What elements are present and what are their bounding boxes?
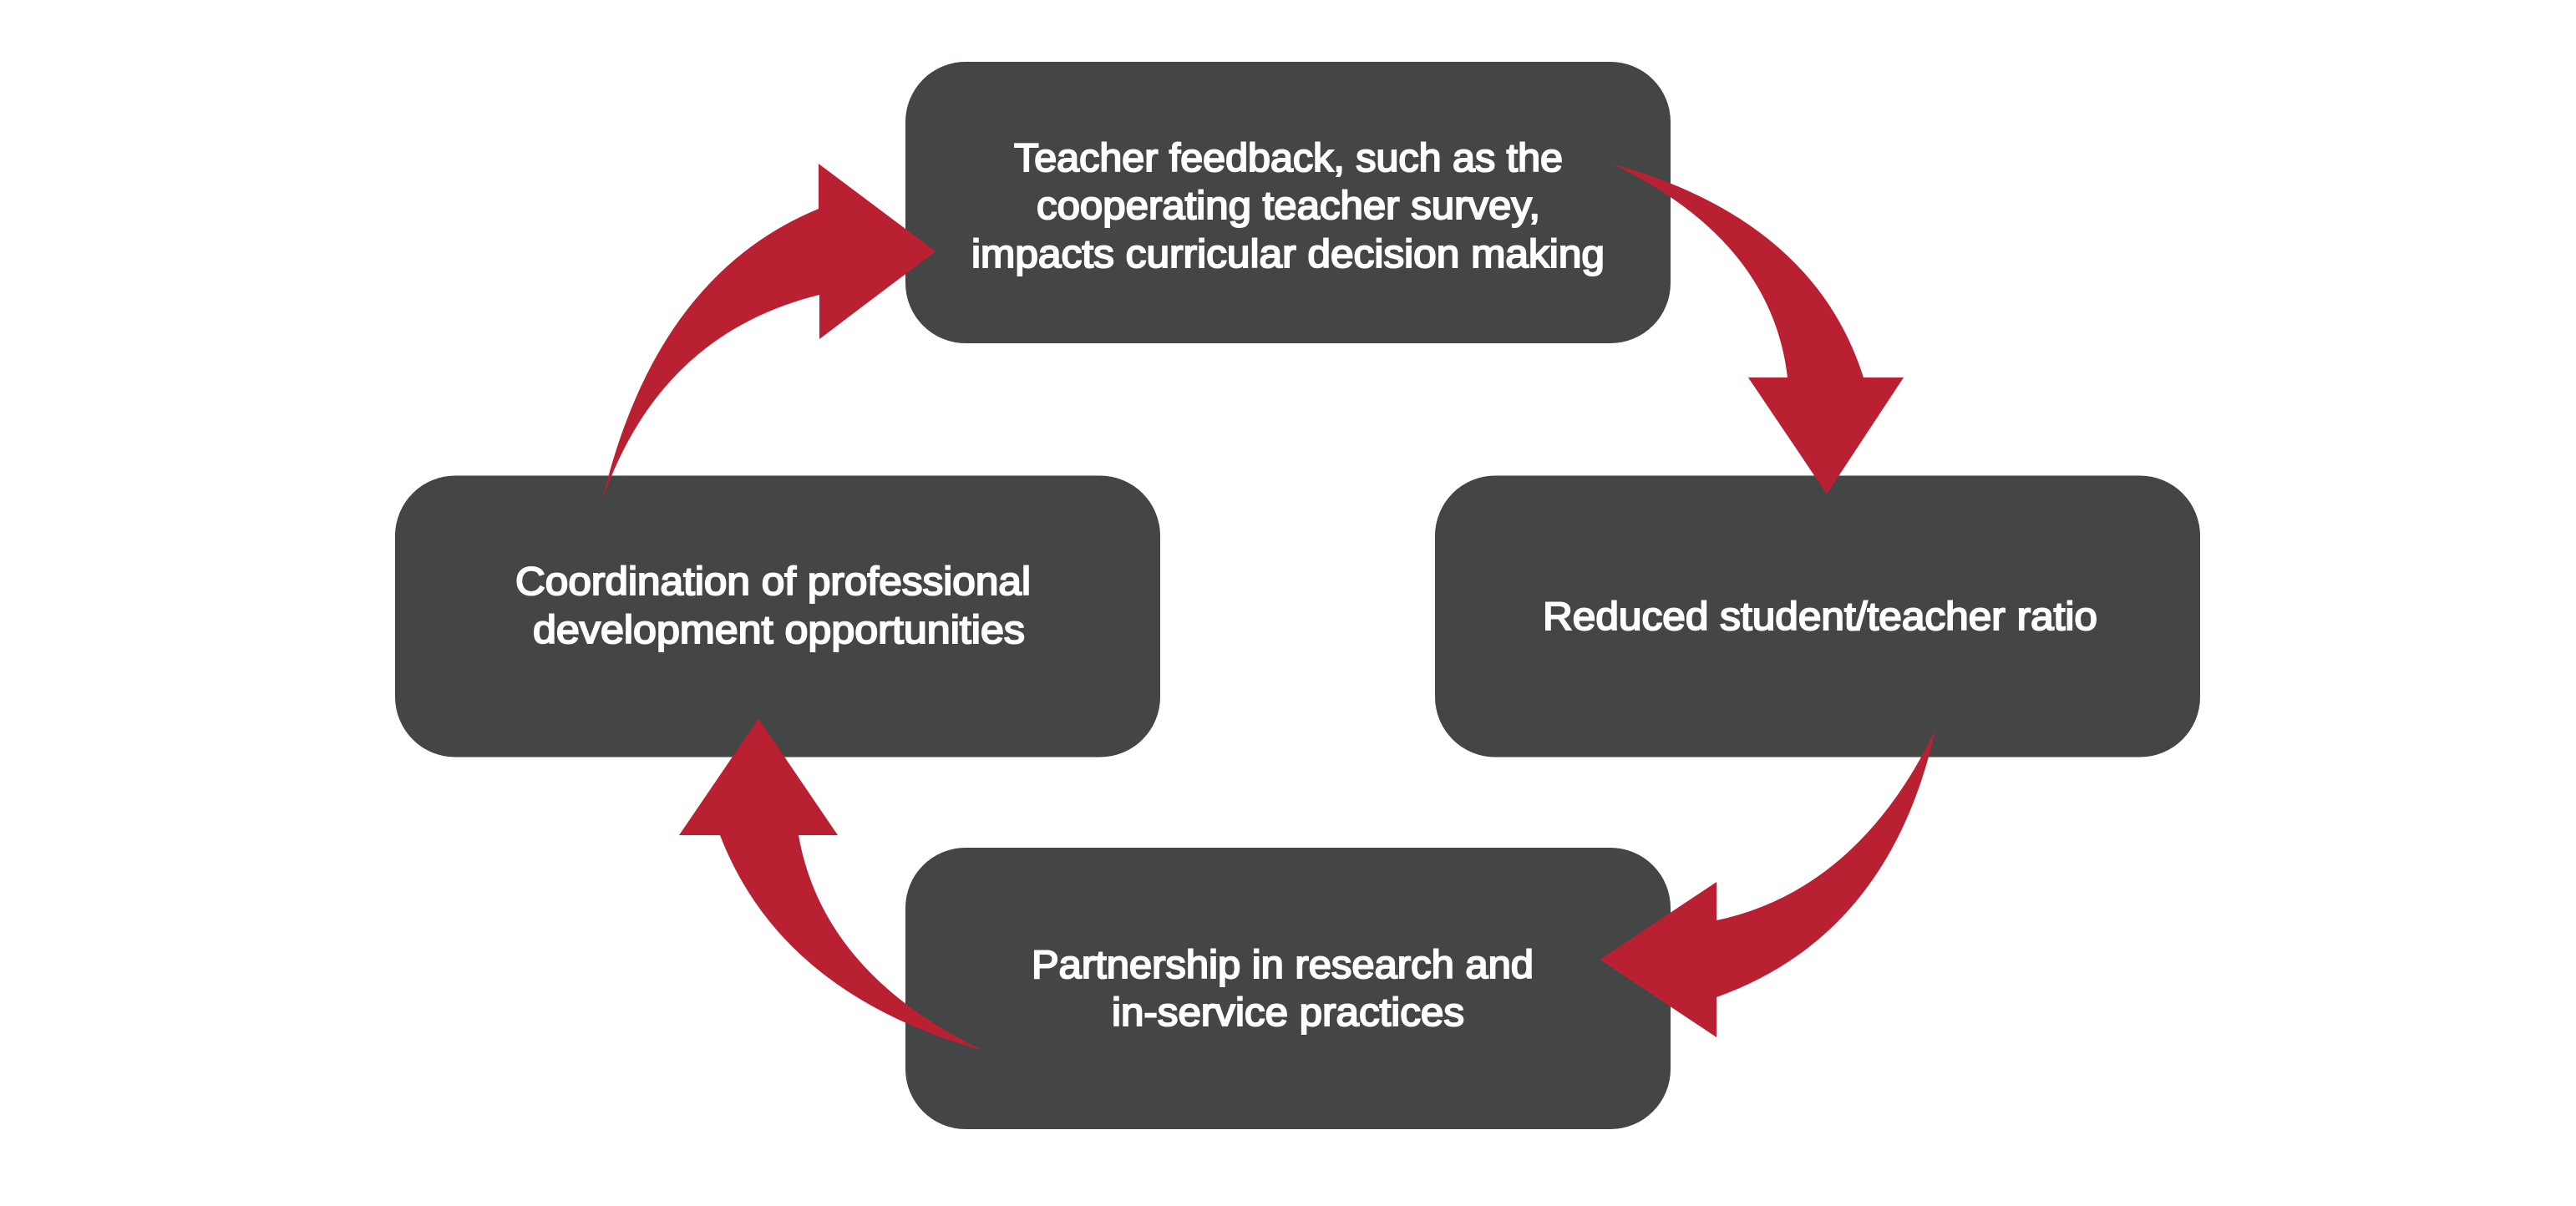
panel: professional development box: development opportunities (533, 607, 1025, 651)
arrow: partnership to professional development (679, 718, 983, 1051)
arrow: feedback to reduced ratio (1612, 164, 1904, 494)
panel: partnership box (905, 848, 1671, 1129)
panel: reduced ratio box: Reduced student/teacher ratio (1543, 594, 2097, 638)
arrow: professional development to feedback (602, 164, 936, 500)
arrow: reduced ratio to partnership (1600, 730, 1935, 1037)
panel: teacher feedback box: cooperating teacher survey, (1037, 183, 1540, 227)
panel: teacher feedback box: Teacher feedback, such as the (1014, 135, 1563, 180)
panel: professional development box: Coordination of professional (515, 559, 1031, 603)
panel: partnership box: in-service practices (1112, 990, 1464, 1034)
panel: professional development box (395, 476, 1160, 757)
panel: reduced ratio box (1435, 476, 2200, 757)
panel: partnership box: Partnership in research and (1032, 942, 1534, 986)
panel: teacher feedback box: impacts curricular decision making (971, 231, 1605, 276)
panel: teacher feedback box (905, 62, 1671, 343)
